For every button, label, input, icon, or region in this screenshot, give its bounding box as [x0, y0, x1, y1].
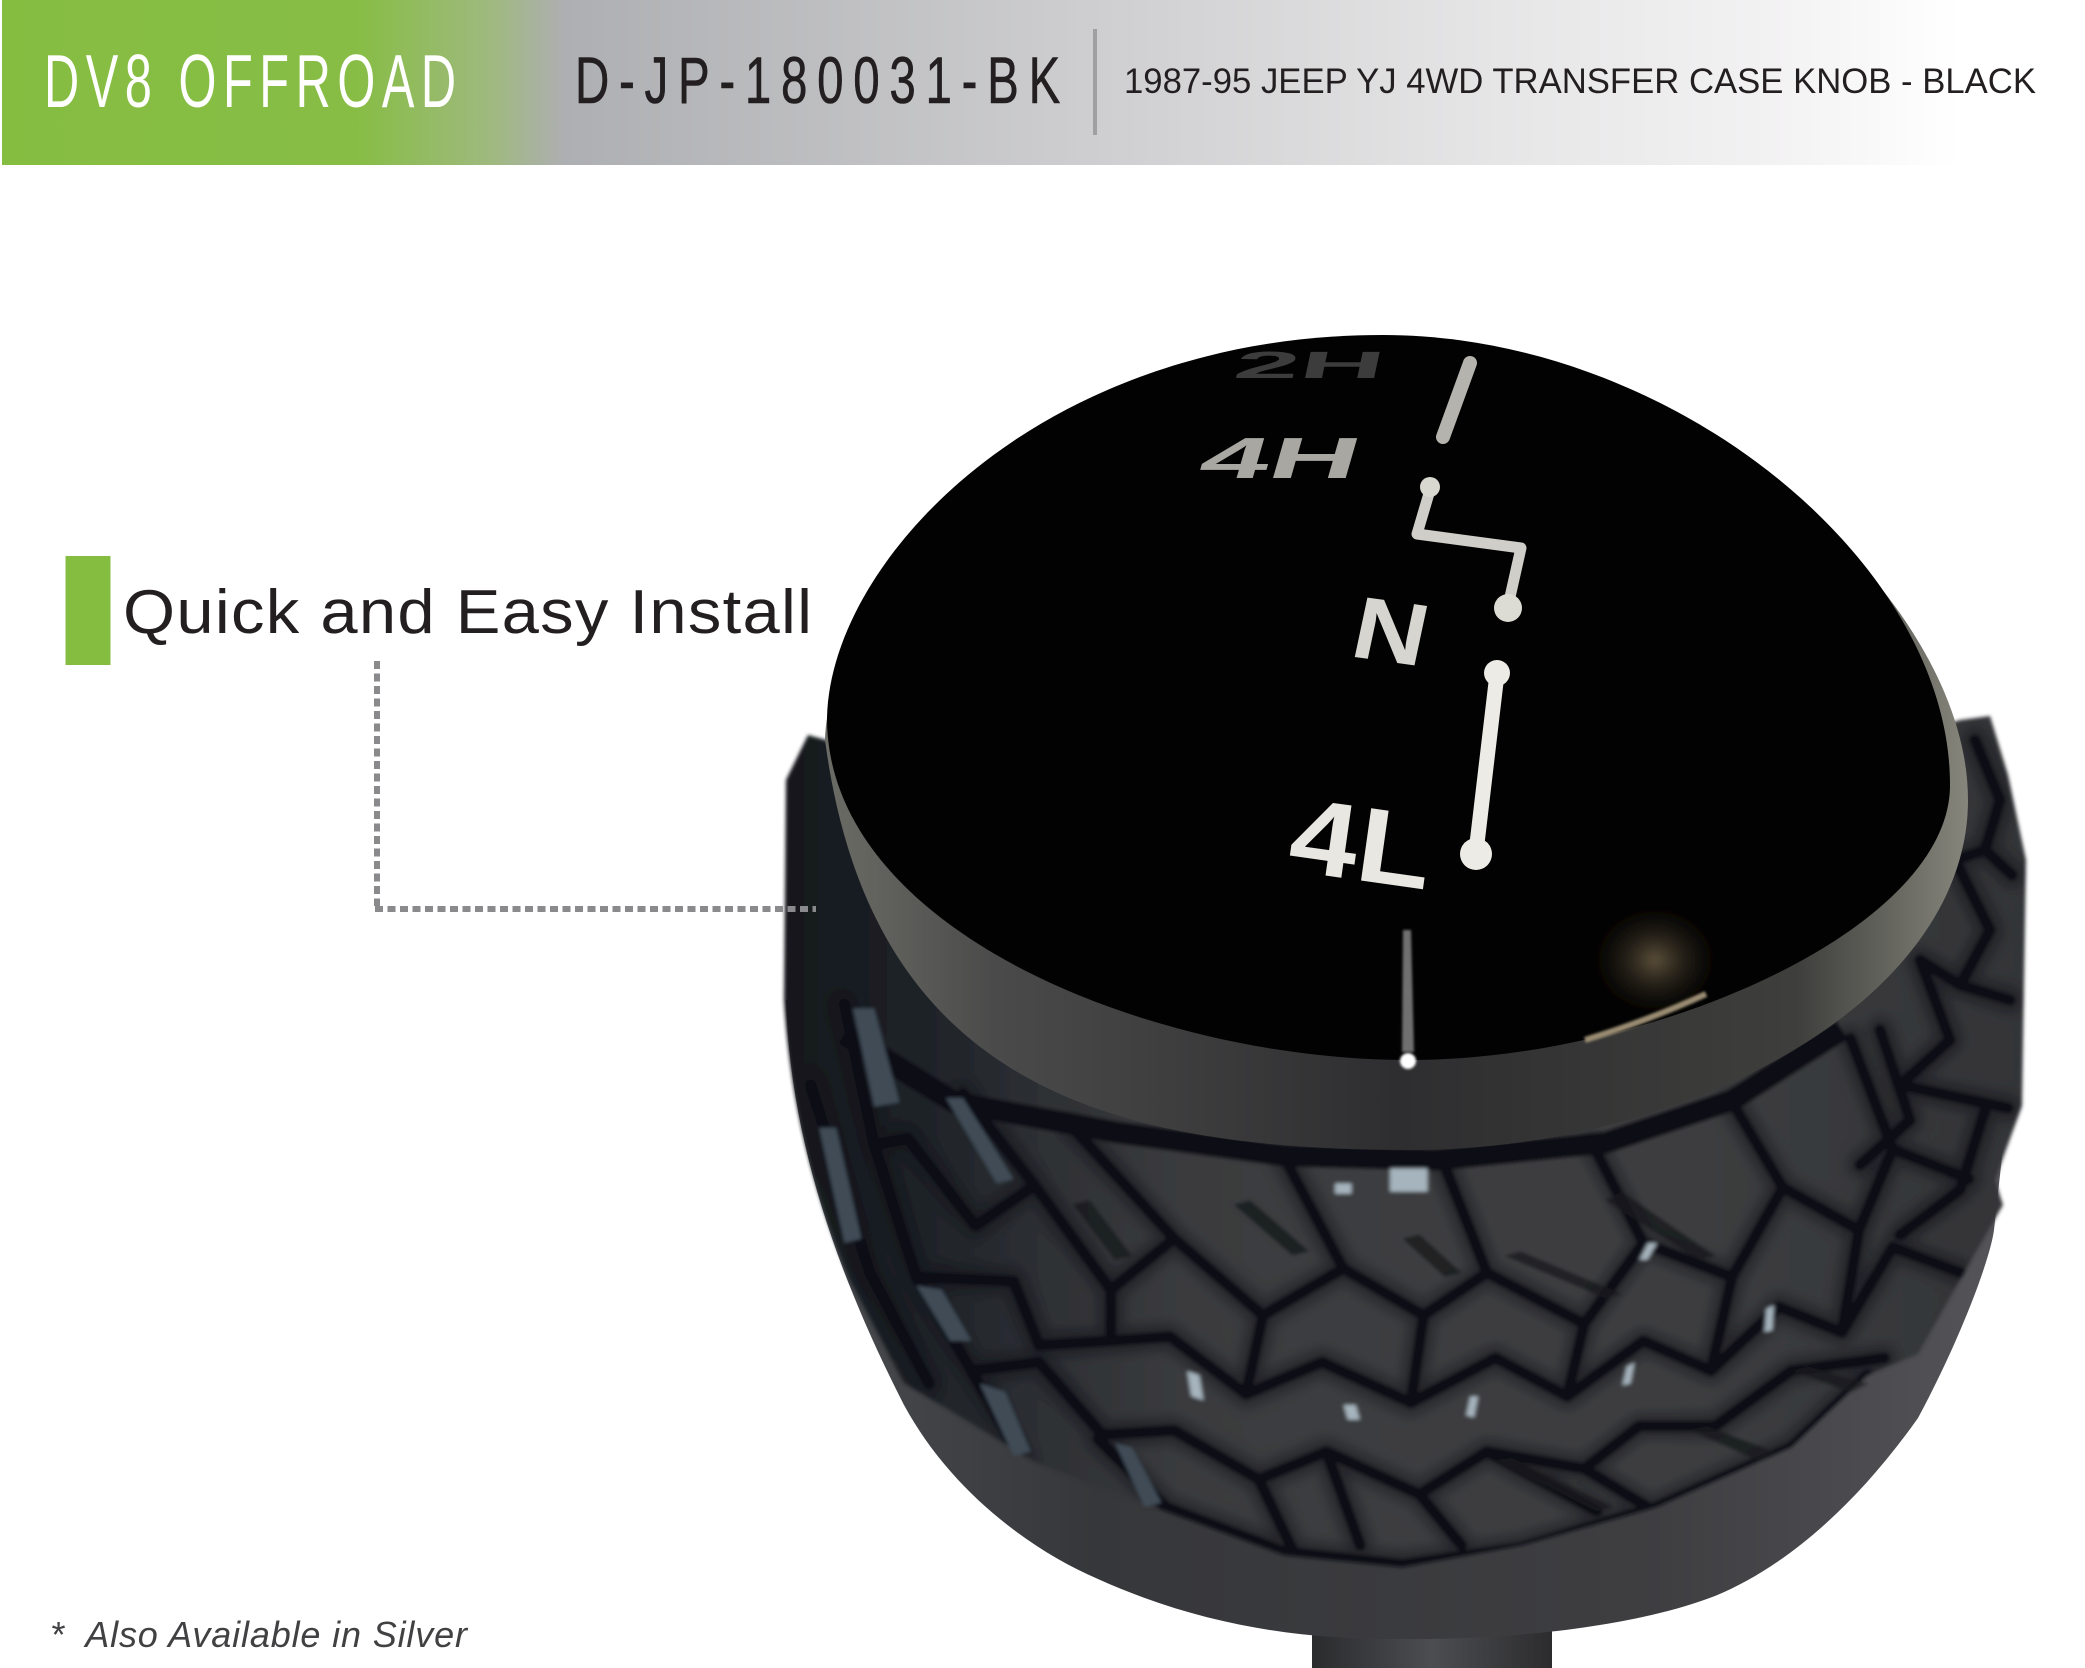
dotted leader line	[375, 661, 816, 909]
header banner	[2, 0, 2085, 165]
shift labels	[1192, 344, 1440, 913]
product photo: transfer case knob	[784, 335, 2026, 1668]
tread grooves	[811, 740, 2012, 1565]
N to 4L line	[1476, 674, 1497, 852]
label 4L: 4L	[1283, 776, 1440, 913]
rim glint	[1400, 1053, 1416, 1069]
2H to 4H line	[1443, 363, 1470, 437]
disk rim	[825, 338, 1968, 1150]
4H to N line	[1417, 490, 1521, 606]
knob base	[786, 1000, 2019, 1639]
light stripe	[1585, 994, 1706, 1040]
part number: D-JP-180031-BK	[575, 44, 1060, 118]
dark band under rim	[845, 1030, 1842, 1160]
shift pattern graphics	[1417, 363, 1522, 870]
footnote: * Also Available in Silver	[50, 1614, 469, 1655]
tread side stripes	[819, 1009, 1162, 1507]
callout text: Quick and Easy Install	[123, 577, 812, 646]
bottom streak	[1402, 930, 1414, 1052]
label 2H: 2H	[1230, 344, 1389, 387]
knob stem	[1312, 1620, 1552, 1668]
brand name: DV8 OFFROAD	[44, 41, 456, 124]
tread gloss highlights	[1187, 1168, 1774, 1420]
green marker	[66, 556, 110, 665]
callout: quick and easy install	[66, 556, 816, 909]
bronze glare	[1606, 918, 1704, 1002]
product title: 1987-95 JEEP YJ 4WD TRANSFER CASE KNOB - BLACK	[1124, 62, 2036, 101]
tread shading stripes	[1073, 1192, 1867, 1511]
tire tread body	[784, 716, 2026, 1567]
label N: N	[1344, 578, 1438, 685]
label 4H: 4H	[1192, 425, 1369, 491]
header divider	[1093, 29, 1097, 135]
black top face	[827, 335, 1950, 1069]
